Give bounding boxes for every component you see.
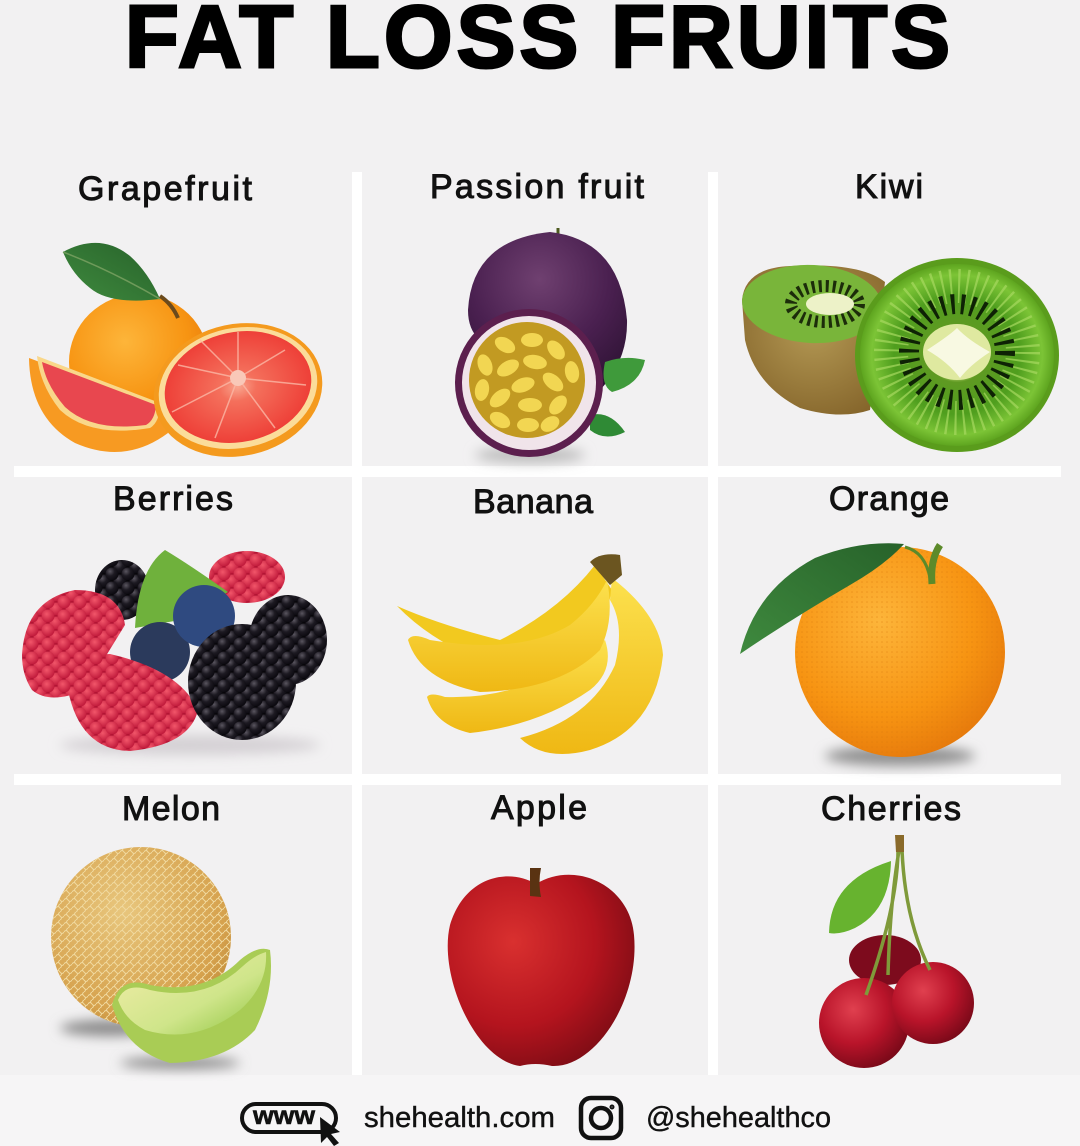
- label: Orange: Orange: [829, 480, 949, 518]
- label: Melon: Melon: [122, 790, 220, 828]
- handle: @shehealthco: [646, 1102, 831, 1134]
- panel: orange: [740, 480, 1005, 766]
- panel: apple: [448, 789, 635, 1066]
- website: shehealth.com: [364, 1102, 555, 1134]
- panel: grapefruit: [29, 170, 335, 472]
- label: Banana: Banana: [473, 483, 593, 521]
- icon: instagram: [581, 1098, 621, 1138]
- panel: cherries: [819, 790, 974, 1068]
- icon: berries: [22, 550, 327, 755]
- panel: berries: [22, 480, 327, 755]
- icon: www cursor: www: [252, 1102, 316, 1130]
- icon: www cursor: [242, 1102, 340, 1146]
- panel: banana: [397, 483, 663, 754]
- icon: melon: [51, 847, 271, 1069]
- icon: apple: [448, 868, 635, 1066]
- panel: kiwi: [740, 168, 1059, 452]
- label: Cherries: Cherries: [821, 790, 961, 828]
- label: Grapefruit: Grapefruit: [78, 170, 253, 208]
- icon: orange: [740, 543, 1005, 766]
- icon: grapefruit: [29, 243, 335, 472]
- panel: melon: [51, 790, 271, 1069]
- panel: passion fruit: [430, 168, 645, 463]
- label: Kiwi: Kiwi: [855, 168, 923, 206]
- footer: [242, 1098, 831, 1146]
- label: Apple: Apple: [491, 789, 587, 827]
- icon: banana: [397, 554, 663, 754]
- label: Berries: Berries: [113, 480, 233, 518]
- icon: passion fruit: [455, 228, 645, 463]
- icon: cherries: [819, 835, 974, 1068]
- icon: kiwi: [740, 258, 1059, 452]
- label: Passion fruit: Passion fruit: [430, 168, 645, 206]
